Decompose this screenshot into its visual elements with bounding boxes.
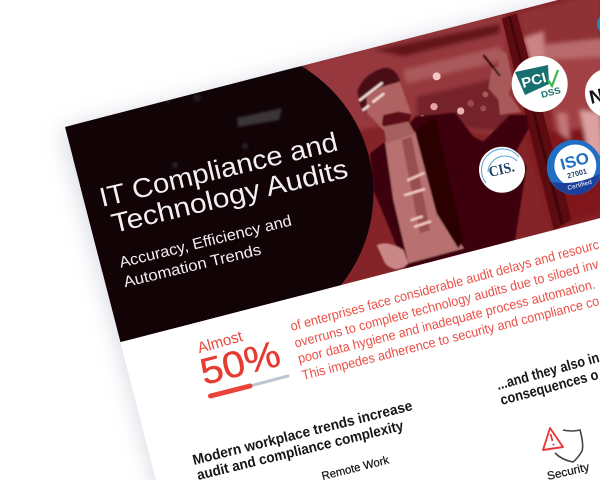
faint background highlights (165, 94, 282, 168)
man in jacket (357, 50, 529, 272)
bokeh lights (421, 72, 488, 119)
photo background (73, 0, 600, 367)
badge: CIS: CIS. (487, 159, 516, 181)
badge: ISO 27001: ISO (559, 150, 591, 174)
title: Technology Audits (108, 154, 351, 239)
badge: ISO 27001 (547, 140, 600, 195)
title: IT Compliance and (96, 127, 341, 213)
badge: CIS (479, 147, 525, 193)
badge: top right (597, 13, 600, 35)
pillar (502, 13, 572, 230)
stat: almost 50%: 50% (196, 333, 284, 393)
heading: modern workplace trends: Modern workplace trends increase (191, 398, 414, 469)
subtitle: Automation Trends (122, 241, 263, 291)
badge: PCI DSS: DSS (540, 85, 562, 100)
badge: N (585, 68, 600, 118)
title (96, 127, 351, 239)
subtitle: Accuracy, Efficiency and (118, 213, 293, 272)
subtitle (118, 213, 293, 291)
stat: almost 50%: Almost (196, 328, 245, 357)
intro paragraph (289, 237, 600, 383)
badge: PCI DSS (512, 56, 568, 112)
icon: security shield with warning (543, 428, 583, 462)
badge: ISO 27001: Certified (567, 180, 593, 192)
dark title circle (65, 66, 374, 342)
badge: ISO 27001: 27001 (566, 167, 588, 180)
progress bar (210, 376, 288, 396)
badge: PCI DSS: PCI (520, 69, 548, 91)
hero panel (60, 0, 600, 367)
